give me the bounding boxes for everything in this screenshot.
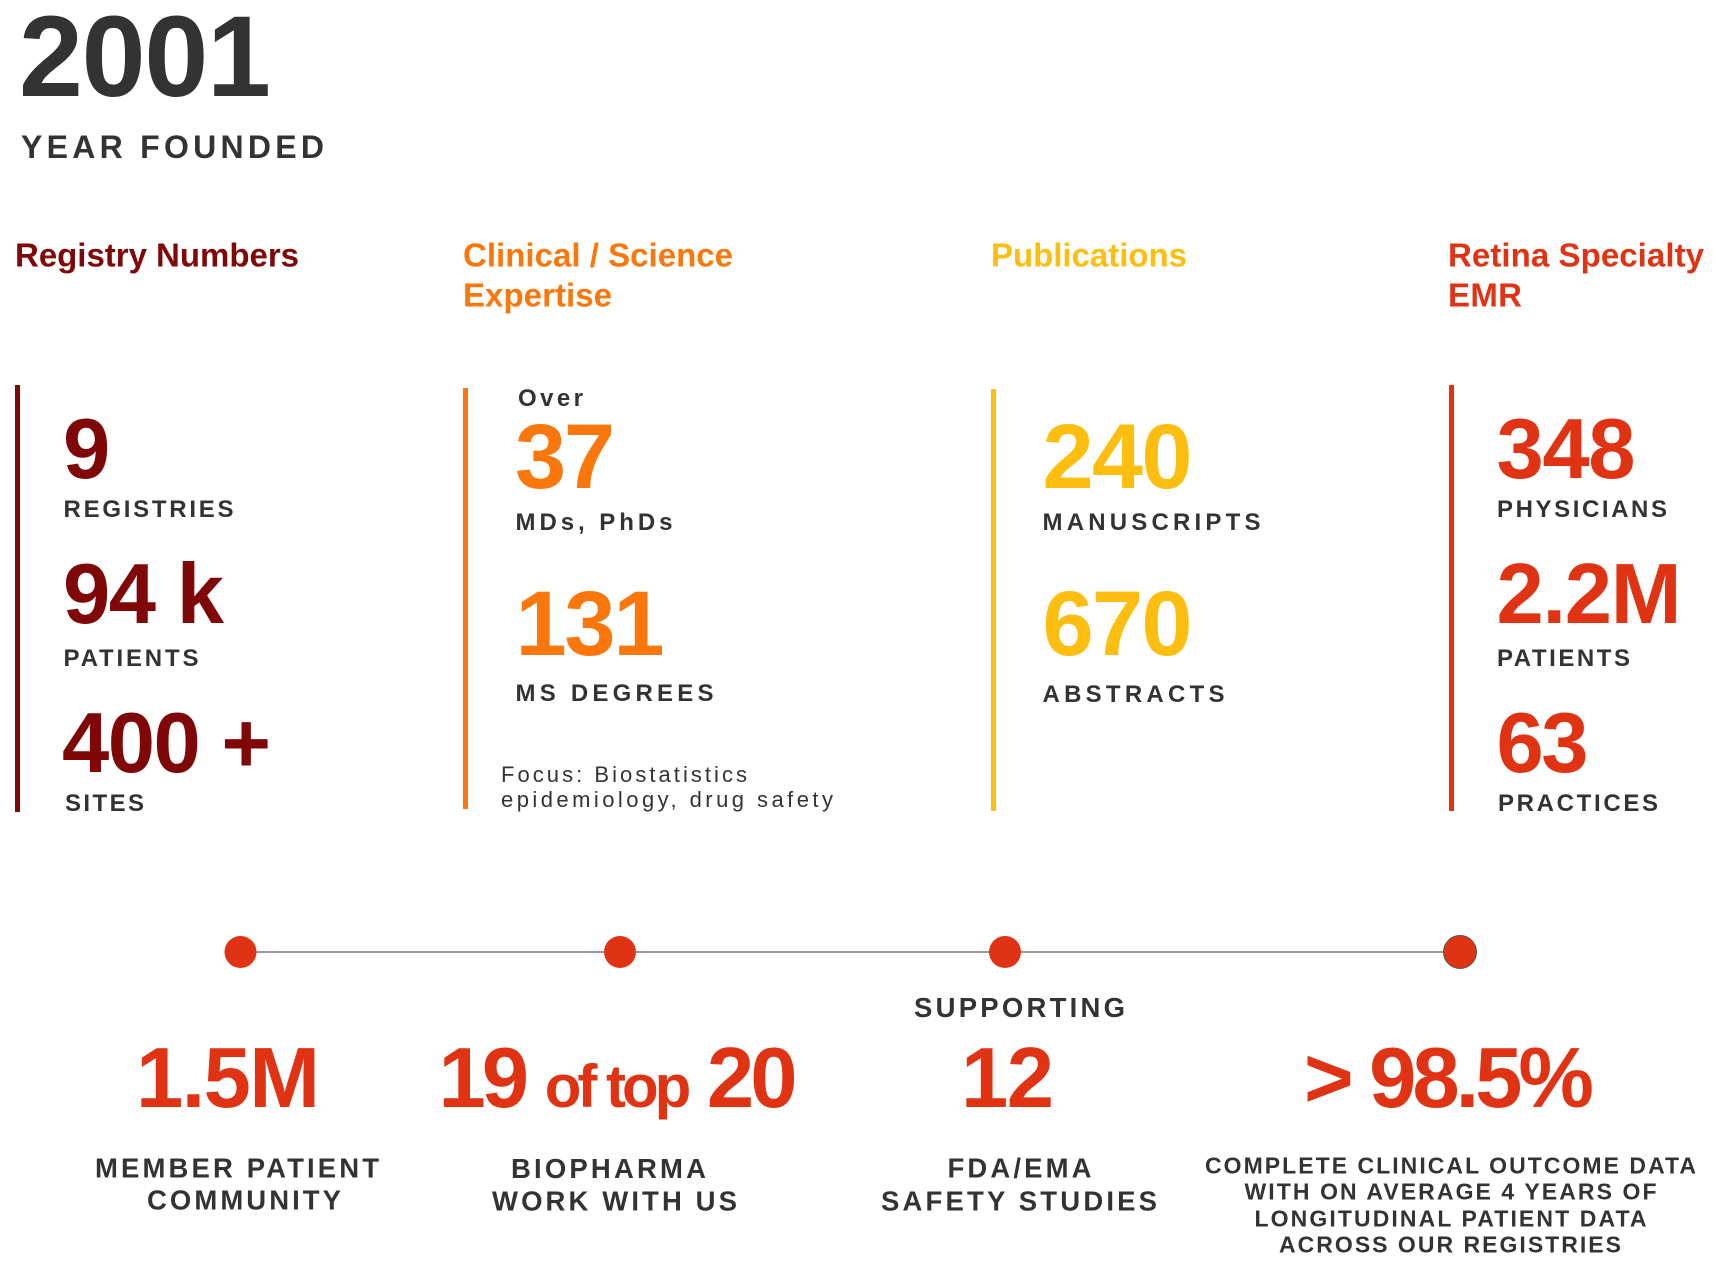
stat: MS degrees	[516, 573, 714, 707]
stat: member patient community: 1.5M	[136, 1031, 320, 1126]
timeline dot 4	[1444, 936, 1476, 968]
focus note: epidemiology, drug safety	[501, 787, 833, 812]
stat: safety studies	[881, 992, 1157, 1216]
stat: physicians	[1496, 402, 1667, 523]
stat: registries: REGISTRIES	[64, 496, 234, 523]
stat: MDs and PhDs	[515, 385, 672, 536]
stat: MS degrees: 131	[516, 573, 664, 675]
timeline dot 2	[604, 936, 636, 968]
caption: BIOPHARMA	[511, 1153, 706, 1184]
stat: manuscripts: MANUSCRIPTS	[1042, 509, 1260, 536]
heading: Clinical / Science	[463, 236, 733, 274]
timeline	[224, 936, 1476, 968]
timeline dot 3	[989, 936, 1021, 968]
stat: MDs and PhDs: MDs, PhDs	[516, 509, 672, 536]
stat: practices: PRACTICES	[1498, 790, 1658, 817]
caption line 2: SAFETY STUDIES	[881, 1186, 1157, 1216]
heading: Retina Specialty	[1448, 236, 1705, 274]
caption: COMPLETE CLINICAL OUTCOME DATA	[1205, 1152, 1696, 1178]
stat: abstracts: ABSTRACTS	[1042, 681, 1224, 708]
stat: practices: 63	[1496, 696, 1588, 791]
stat: registries	[63, 402, 234, 523]
stat: practices	[1496, 696, 1658, 817]
stat: physicians: 348	[1496, 402, 1636, 497]
stat: abstracts	[1042, 573, 1224, 708]
caption: WITH ON AVERAGE 4 YEARS OF	[1244, 1178, 1656, 1204]
focus note: Focus: Biostatistics	[501, 762, 747, 787]
stat: registries: 9	[63, 402, 110, 497]
caption line 2: WORK WITH US	[492, 1186, 737, 1216]
caption	[1205, 1152, 1696, 1258]
vertical bar	[1449, 385, 1454, 811]
stat: patients: 94 k	[63, 547, 225, 642]
panel: clinical science expertise	[463, 236, 833, 812]
panel: retina specialty EMR	[1448, 236, 1705, 817]
heading: Publications	[991, 236, 1187, 274]
stat: outcome data: > 98.5%	[1304, 1031, 1594, 1126]
heading line 2: EMR	[1448, 276, 1522, 314]
stat: biopharma	[438, 1031, 798, 1216]
year label: YEAR FOUNDED	[21, 129, 324, 165]
caption: LONGITUDINAL PATIENT DATA	[1254, 1206, 1646, 1232]
vertical bar	[463, 388, 468, 809]
panel: registry numbers	[15, 236, 299, 817]
stat: sites: SITES	[65, 790, 144, 817]
stat: MDs and PhDs: Over	[518, 385, 583, 412]
stat: sites: 400 +	[62, 696, 271, 791]
heading line 2: Expertise	[463, 276, 612, 314]
stat: MDs and PhDs: 37	[515, 406, 615, 508]
stat: biopharma: 19 of top 20	[438, 1031, 798, 1126]
stat: patients: 2.2M	[1496, 547, 1682, 642]
caption: MEMBER PATIENT	[95, 1152, 379, 1184]
timeline dot 1	[224, 936, 256, 968]
stat: manuscripts	[1042, 406, 1260, 536]
stat: outcome data	[1205, 1031, 1696, 1258]
vertical bar	[15, 385, 20, 812]
caption: ACROSS OUR REGISTRIES	[1279, 1232, 1621, 1258]
stat: abstracts: 670	[1042, 573, 1192, 675]
stat: safety studies: 12	[961, 1031, 1054, 1126]
caption line 2: COMMUNITY	[147, 1184, 341, 1216]
stat: patients: PATIENTS	[1497, 645, 1630, 672]
stat: patients: PATIENTS	[64, 645, 198, 672]
panel: publications	[991, 236, 1260, 811]
stat: MS degrees: MS DEGREES	[516, 680, 714, 707]
stat: manuscripts: 240	[1042, 406, 1192, 508]
stat: physicians: PHYSICIANS	[1497, 496, 1667, 523]
stat: member patient community	[95, 1031, 379, 1216]
vertical bar	[991, 389, 996, 811]
heading: Registry Numbers	[15, 236, 299, 274]
caption: FDA/EMA	[948, 1152, 1092, 1184]
focus note	[501, 762, 833, 812]
panel: year founded	[19, 0, 324, 165]
overline: SUPPORTING	[914, 992, 1125, 1023]
